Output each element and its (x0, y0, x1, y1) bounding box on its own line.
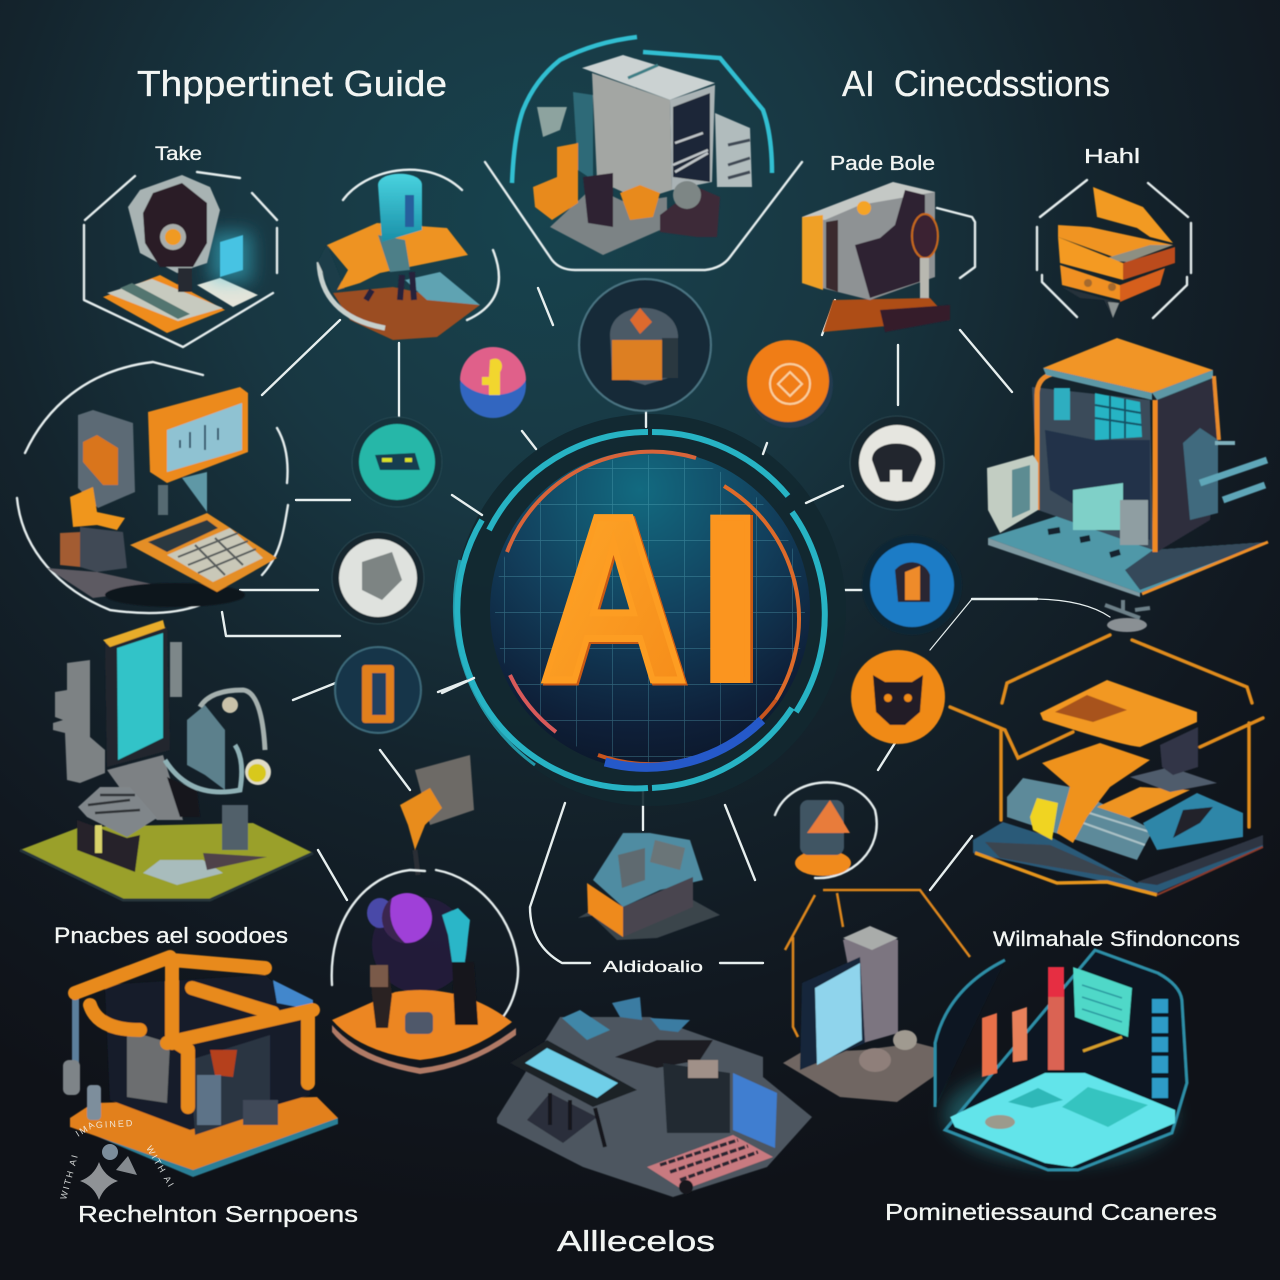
keyboard (647, 1135, 773, 1190)
red bars (982, 1013, 997, 1077)
platform (783, 1043, 955, 1102)
flap (1093, 187, 1173, 243)
seat (405, 1012, 433, 1034)
pale base (143, 860, 223, 885)
cylinder (378, 174, 422, 242)
screen (117, 633, 163, 760)
floor (988, 512, 1268, 593)
orange ribbon (1042, 743, 1150, 843)
icon: white robot bubble (850, 416, 944, 510)
side blocks (170, 642, 182, 697)
triangle (116, 1156, 137, 1175)
label: Pade Bole: Pade Bole (830, 153, 935, 175)
right machine (1183, 428, 1218, 520)
lens (160, 224, 186, 250)
footprints (1048, 530, 1120, 555)
sparkle (80, 1162, 118, 1200)
heading: right: AI Cinecdsstions (842, 63, 1110, 104)
gray ball machine (660, 187, 720, 237)
blue items (562, 1010, 610, 1040)
keyboard (130, 513, 277, 592)
gray plant (537, 107, 567, 137)
platform (20, 823, 313, 900)
panel: monitor stand (783, 890, 970, 1102)
label: Wilmahale Sfindoncons: Wilmahale Sfindoncons (993, 928, 1240, 951)
AI letter shadow: A (542, 469, 689, 733)
side bars (1152, 999, 1168, 1098)
panel: left lower terminal (20, 620, 313, 900)
base (823, 298, 950, 332)
server body (592, 73, 672, 200)
keyboard (78, 787, 157, 837)
base (333, 287, 480, 340)
monitor frame (105, 627, 170, 767)
arcs (343, 170, 499, 320)
icon: pink key (460, 347, 526, 418)
ring ticks (442, 408, 843, 693)
dark oval (615, 1040, 713, 1068)
panel: right server room (987, 338, 1268, 597)
icon: center lower chair (578, 833, 720, 940)
icon: teal bubble (352, 417, 442, 507)
orange canisters (533, 143, 578, 220)
AI letter I: I (698, 467, 763, 731)
icon: center top bubble (579, 279, 711, 411)
frame (485, 162, 802, 270)
ring text: IMA (74, 1119, 98, 1139)
orb (367, 898, 393, 928)
platform (332, 990, 512, 1060)
person one (370, 965, 392, 1028)
panel: right orange stack (950, 600, 1263, 895)
book base (103, 275, 225, 333)
cup objects (859, 1048, 891, 1072)
platform rim (70, 1118, 338, 1177)
small cyan panel (1054, 388, 1070, 420)
drone device (1107, 618, 1147, 632)
gray flat (1130, 767, 1217, 792)
legs (366, 272, 414, 300)
panel: Take device (84, 172, 277, 347)
orange knob (857, 201, 871, 215)
body (1007, 778, 1153, 860)
body under monitor (107, 755, 183, 820)
tablet (510, 1040, 637, 1107)
screen (210, 232, 252, 282)
base (497, 1017, 812, 1197)
halo (372, 897, 468, 993)
base (973, 822, 1263, 893)
room outline (935, 950, 1187, 1170)
shield (128, 175, 220, 273)
tower (843, 928, 898, 1043)
yellow lamp (245, 759, 271, 785)
hex frame (84, 172, 277, 347)
dark support (1160, 727, 1198, 775)
dark column (663, 1063, 730, 1133)
panel: cyan room (935, 950, 1187, 1170)
panel: top server (485, 37, 802, 270)
inner accent arcs (507, 452, 799, 767)
lower faces (1060, 265, 1120, 300)
interior machines (1045, 430, 1150, 540)
side unit (715, 113, 752, 187)
server front rack (670, 85, 715, 190)
panel: Hahl box (1037, 180, 1191, 318)
icon: orange device bubble (335, 647, 421, 733)
top (1058, 225, 1173, 262)
dark front (623, 877, 693, 937)
icon: lower right bubble (775, 782, 877, 878)
orange frame (785, 890, 970, 1037)
orange frame (75, 957, 313, 1107)
frame (937, 208, 975, 278)
chair floor (578, 900, 720, 940)
body (802, 182, 935, 300)
upper faces (1058, 237, 1123, 280)
server top (582, 55, 715, 100)
orange top (327, 223, 468, 290)
label: Rechelnton Sernpoens: Rechelnton Sernpoens (78, 1201, 358, 1227)
ring text: GINED (96, 1118, 135, 1130)
hex frame (1037, 180, 1191, 318)
emblem backing disc (454, 414, 846, 806)
panel: cyan cylinder table (318, 170, 499, 340)
ring text: WITH AI (58, 1152, 80, 1201)
panel: left workstation (17, 362, 288, 613)
orange frame (950, 635, 1263, 827)
globe grid (495, 455, 805, 765)
floor (550, 187, 667, 255)
small idols (63, 1060, 80, 1095)
label: Take: Take (155, 144, 202, 165)
panel: orange frame machine (63, 957, 338, 1177)
outer cyan ring (454, 432, 825, 788)
dome (593, 833, 703, 907)
monitor (800, 957, 865, 1070)
person two (452, 962, 478, 1025)
white cabinet (987, 455, 1038, 533)
floor (47, 568, 170, 598)
head (78, 410, 135, 508)
panel: Pade Bole machine (802, 182, 975, 332)
watermark: imagined with AI (58, 1118, 177, 1201)
side gauge (912, 214, 938, 258)
icon: white bubble (332, 532, 424, 624)
label: Pnacbes ael soodoes: Pnacbes ael soodoes (54, 923, 288, 948)
interior (105, 975, 310, 1130)
arc frame (332, 870, 518, 1017)
top slab (1040, 680, 1197, 747)
ring text: WITH AI (144, 1144, 177, 1190)
interior wall (1032, 387, 1153, 550)
yellow strip (103, 620, 165, 647)
panel: center bottom laptops (497, 997, 812, 1197)
glow (945, 1067, 1175, 1163)
label: Aldidoalio: Aldidoalio (603, 959, 703, 976)
monitor (148, 387, 248, 483)
blue panel (273, 980, 313, 1010)
robot arm (200, 690, 265, 750)
left cabinet (53, 660, 105, 783)
roof (1043, 338, 1213, 393)
circle frame (17, 362, 288, 613)
ring text (58, 1118, 177, 1201)
dark window (1173, 807, 1213, 838)
panel: figures on platform (332, 870, 518, 1074)
icon: blue bubble (862, 535, 962, 635)
yellow stylus (1083, 1037, 1122, 1051)
AI letter A: A (540, 467, 687, 731)
globe (490, 450, 810, 770)
dark door (583, 173, 613, 227)
dot (102, 1144, 118, 1160)
yellow tag (1030, 798, 1058, 840)
icon: orange mask (851, 650, 945, 744)
platform rim (332, 1025, 516, 1074)
torso (70, 487, 125, 530)
blue column (72, 995, 79, 1065)
label: Pominetiessaund Ccaneres: Pominetiessaund Ccaneres (885, 1199, 1217, 1225)
tablet stand (527, 1093, 597, 1143)
orange side (587, 883, 623, 937)
teal panel (573, 92, 593, 180)
AI letter I shadow (713, 515, 753, 683)
label: Alllecelos: Alllecelos (557, 1226, 715, 1258)
floor (950, 1073, 1175, 1167)
monitor stand (158, 485, 168, 515)
laptop screen (733, 1073, 777, 1148)
orange sheet (1097, 787, 1190, 818)
platform (70, 1097, 338, 1170)
legs (60, 532, 80, 567)
cyan screen (1095, 393, 1142, 440)
icon: gray orange pad (400, 755, 474, 875)
screen (1073, 967, 1132, 1037)
right wall (1157, 378, 1218, 552)
label: Hahl: Hahl (1084, 146, 1140, 168)
center AI emblem (442, 408, 846, 806)
connector lines (222, 288, 1110, 963)
icon: orange medallion (747, 340, 833, 428)
dark arch (167, 777, 200, 817)
heading: left: Thppertinet Guide (137, 63, 447, 104)
